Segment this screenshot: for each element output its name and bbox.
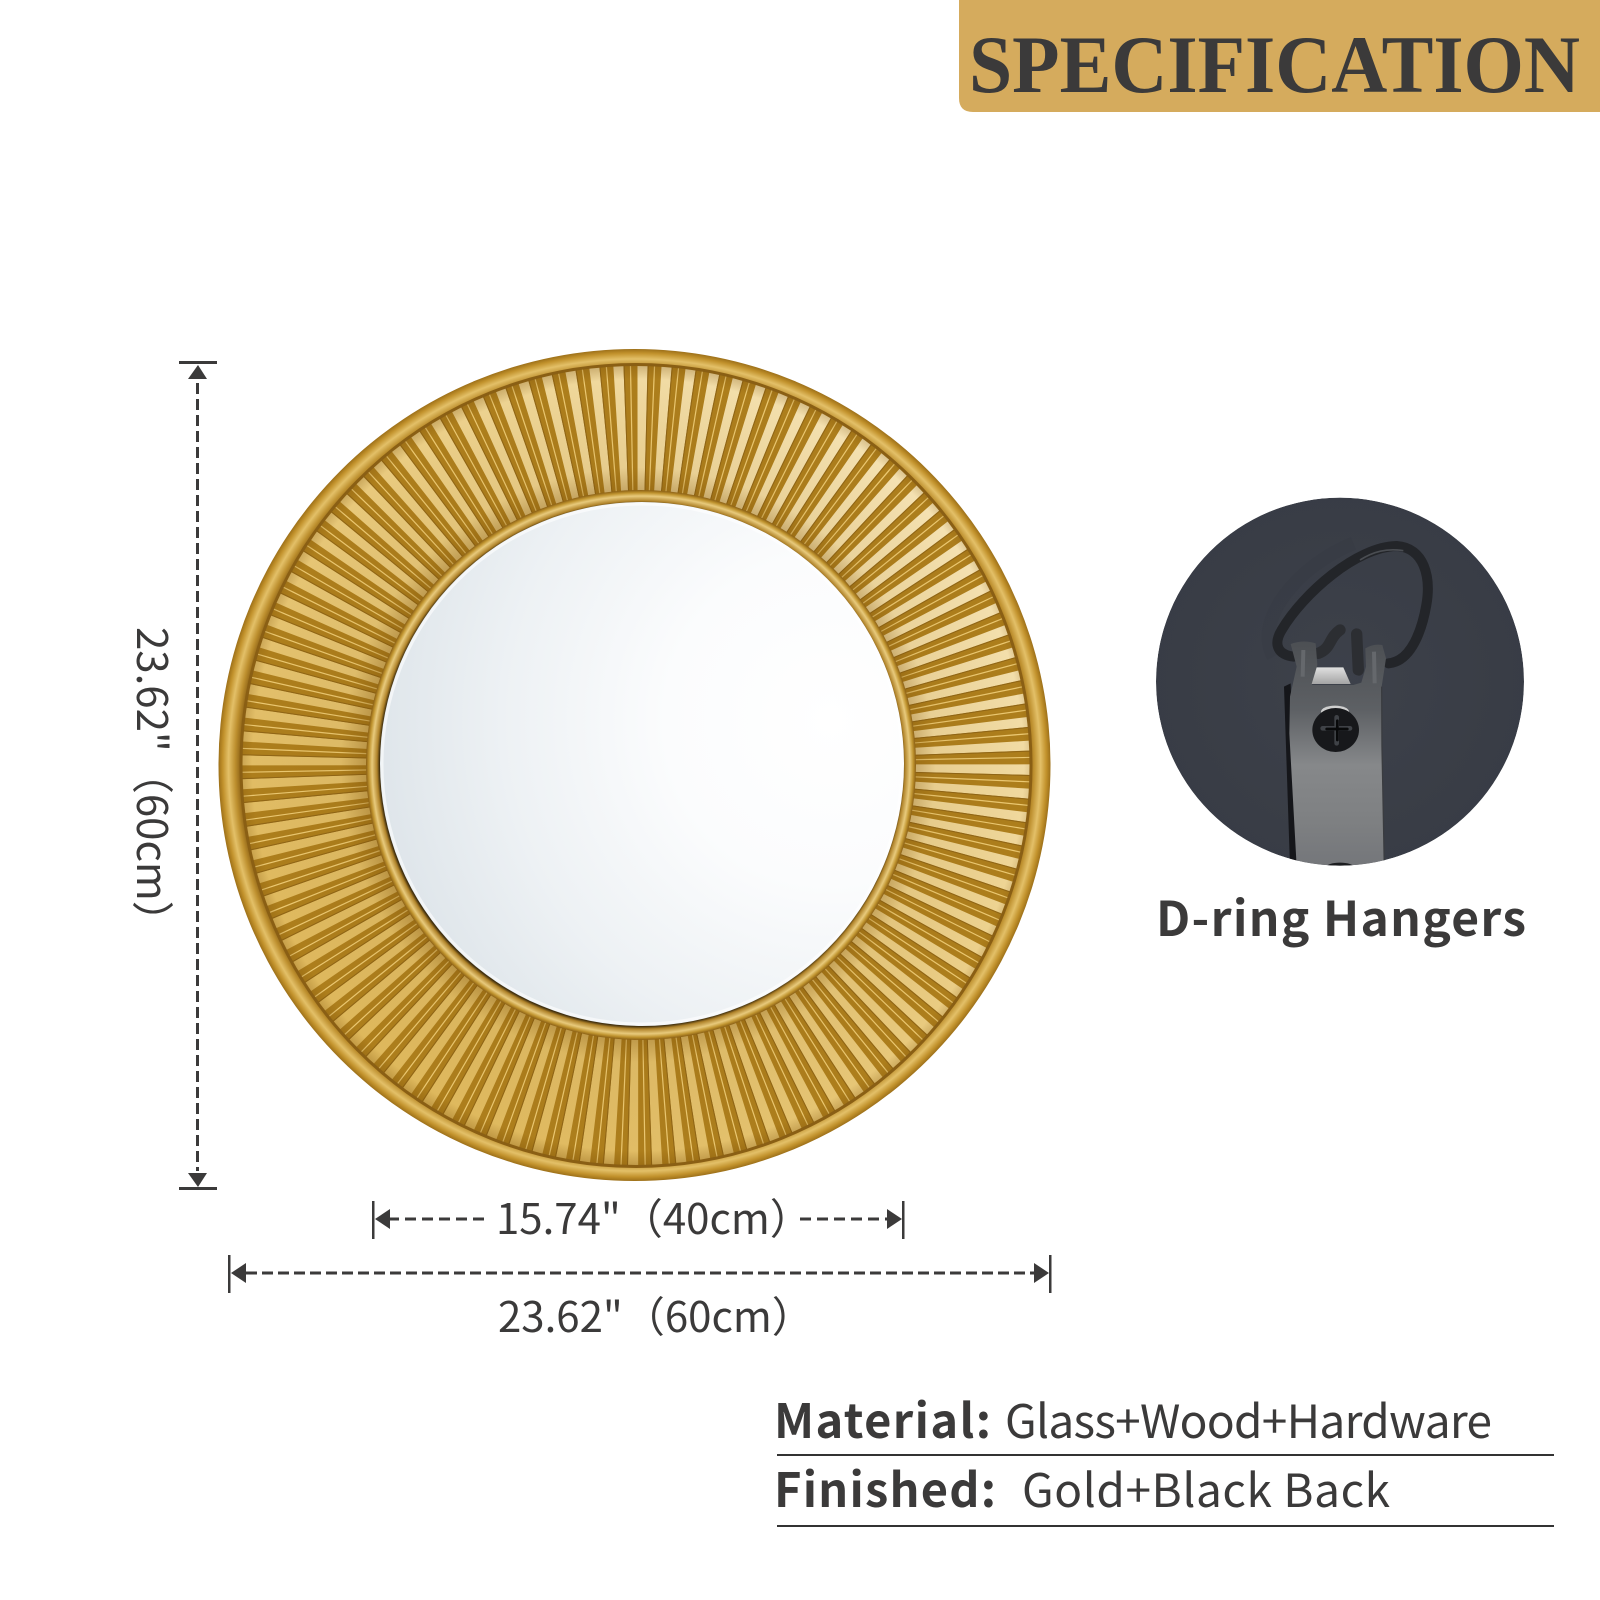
D ring wire xyxy=(1277,546,1428,663)
right dashes xyxy=(800,1218,887,1220)
banner title: SPECIFICATION xyxy=(969,19,1580,110)
radial ribs xyxy=(303,430,973,1100)
screw slot highlight xyxy=(1321,706,1349,713)
strap dark right edge xyxy=(1382,687,1384,867)
banner background xyxy=(959,0,1600,112)
specification banner xyxy=(959,0,1600,112)
right arrow xyxy=(887,1209,902,1229)
finished row xyxy=(774,1452,1390,1521)
strap ear highlight xyxy=(1303,650,1375,683)
height top tick xyxy=(179,361,217,364)
height dashed line xyxy=(196,383,199,1171)
strap side edge xyxy=(1284,683,1298,867)
height label: 23.62"（60cm） xyxy=(124,627,185,943)
D-ring hanger photo xyxy=(1156,498,1524,872)
material key: Material: xyxy=(774,1383,991,1452)
wire highlight xyxy=(1360,550,1403,560)
metal strap xyxy=(1289,641,1386,867)
glass bevel xyxy=(382,504,902,1024)
outer frame ring xyxy=(218,349,1050,1181)
divider two xyxy=(777,1525,1554,1527)
height top arrow xyxy=(188,365,207,379)
screw head xyxy=(1312,708,1359,752)
glass diameter label: 15.74"（40cm） xyxy=(496,1186,812,1247)
finished value: Gold+Black Back xyxy=(1022,1455,1390,1521)
round gold sunburst mirror xyxy=(218,349,1050,1181)
finished key: Finished: xyxy=(774,1452,996,1521)
overall width dimension xyxy=(228,1255,1052,1345)
screw cross xyxy=(1323,717,1350,743)
right tick xyxy=(1049,1255,1052,1293)
screw xyxy=(1312,706,1359,752)
lower screw xyxy=(1327,862,1353,866)
ring shadow xyxy=(1268,543,1353,657)
right tick xyxy=(902,1201,904,1239)
mirror glass xyxy=(380,502,904,1026)
screw cross recess xyxy=(1327,721,1347,740)
height bottom tick xyxy=(179,1187,217,1190)
inner frame ring xyxy=(366,490,916,1040)
left dashes xyxy=(390,1218,488,1220)
glass diameter dimension xyxy=(372,1186,904,1247)
left tick xyxy=(372,1201,374,1239)
left arrow xyxy=(231,1263,246,1283)
overall width label: 23.62"（60cm） xyxy=(498,1284,814,1345)
height bottom arrow xyxy=(188,1173,207,1187)
divider one xyxy=(777,1454,1554,1456)
height dimension xyxy=(124,361,217,1190)
outer ring inner shadow line xyxy=(241,364,1031,1166)
wall background xyxy=(1156,498,1524,866)
D-ring Hangers label: D-ring Hangers xyxy=(1156,880,1526,950)
dashed line xyxy=(246,1272,1034,1274)
material value: Glass+Wood+Hardware xyxy=(1005,1386,1492,1452)
hinge loops xyxy=(1318,630,1358,670)
right arrow xyxy=(1034,1263,1049,1283)
left tick xyxy=(228,1255,230,1293)
bright chip xyxy=(1312,667,1351,684)
material and finish list xyxy=(774,1383,1554,1527)
material row xyxy=(774,1383,1492,1452)
left arrow xyxy=(375,1209,390,1229)
